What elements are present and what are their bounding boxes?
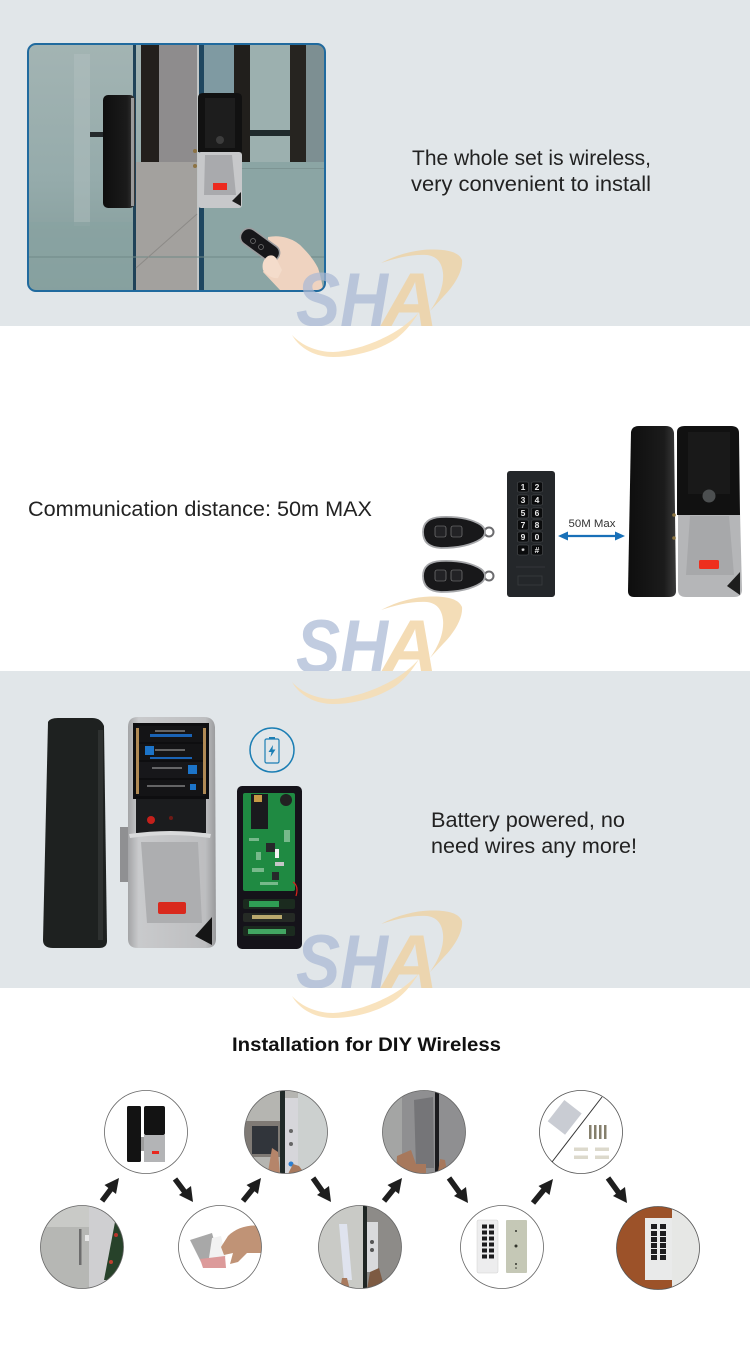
left lock body: [103, 95, 135, 208]
arrow: [102, 1178, 119, 1201]
watermark 1: SH: [296, 258, 390, 343]
keypad: [507, 471, 555, 597]
arrow: [175, 1179, 193, 1202]
arrow: [384, 1178, 402, 1201]
silver lower body: [678, 512, 742, 597]
step 8: accessories: [540, 1090, 622, 1174]
section background: battery: [0, 671, 750, 988]
step 4: attach plate to door: [244, 1090, 328, 1174]
keypad: 7: [521, 520, 526, 530]
main unit: [120, 717, 216, 948]
step 2: lock set: [104, 1090, 188, 1174]
watermark 2: SH: [296, 605, 390, 690]
keypad: *: [521, 546, 525, 556]
arrow: [449, 1178, 468, 1203]
watermark 3: SH: [296, 920, 390, 1005]
step 3: peel adhesive: [178, 1205, 262, 1289]
text: wireless caption: [411, 147, 651, 196]
text: wireless caption: very convenient to install: [411, 173, 651, 196]
heading: installation: Installation for DIY Wireless: [232, 1034, 501, 1056]
keypad: 2: [535, 482, 540, 492]
watermark 3: A: [380, 920, 438, 1005]
remote controls pair: [423, 517, 494, 592]
text: communication distance: Communication distance: 50m MAX: [28, 497, 372, 521]
remote two: [423, 561, 494, 592]
keypad: #: [535, 545, 540, 555]
watermark 3: [292, 910, 462, 1018]
keypad: 6: [535, 508, 540, 518]
watermark 2: [292, 596, 462, 704]
text: battery caption: [431, 809, 637, 858]
lock front view: [628, 426, 742, 597]
step 9: keypad installed: [616, 1206, 700, 1290]
right lock body: [193, 93, 242, 208]
photo: lock on glass door with remote: [28, 44, 325, 291]
circuit board housing: [237, 786, 302, 949]
keypad: 5: [521, 508, 526, 518]
keypad: 9: [521, 532, 526, 542]
text: battery caption: Battery powered, no: [431, 809, 625, 832]
keypad: 0: [535, 532, 540, 542]
step 5: adhesive strip: [318, 1205, 402, 1290]
icon: battery in circle: [250, 728, 294, 772]
step 7: keypad front and back: [460, 1206, 544, 1288]
text: wireless caption: The whole set is wireless,: [412, 147, 651, 170]
label: 50M Max: 50M Max: [568, 518, 616, 530]
watermark 2: A: [380, 605, 438, 690]
outer unit: [628, 426, 676, 597]
remote one: [423, 517, 494, 548]
lock with battery cover open: [43, 717, 216, 948]
watermark 1: A: [380, 258, 438, 343]
step 6: press outer unit to door: [382, 1090, 466, 1176]
remote and hand: [237, 225, 323, 290]
section background: communication distance: [0, 326, 750, 671]
arrow: 50M range: [558, 532, 625, 540]
section background: wireless: [0, 0, 750, 326]
keypad: 1: [521, 482, 526, 492]
batteries: [243, 899, 295, 936]
keypad: 3: [521, 495, 526, 505]
arrow: [533, 1179, 553, 1203]
text: battery caption: need wires any more!: [431, 835, 637, 858]
keypad: 4: [535, 495, 540, 505]
keypad: 8: [535, 520, 540, 530]
step 1: door frame: [40, 1205, 124, 1289]
arrow: [313, 1178, 331, 1202]
watermark 1: [292, 249, 462, 357]
arrow: [243, 1178, 261, 1201]
section background: installation: [0, 988, 750, 1349]
outer unit: [43, 718, 107, 948]
battery compartment: [133, 723, 209, 799]
arrow: [608, 1178, 627, 1203]
